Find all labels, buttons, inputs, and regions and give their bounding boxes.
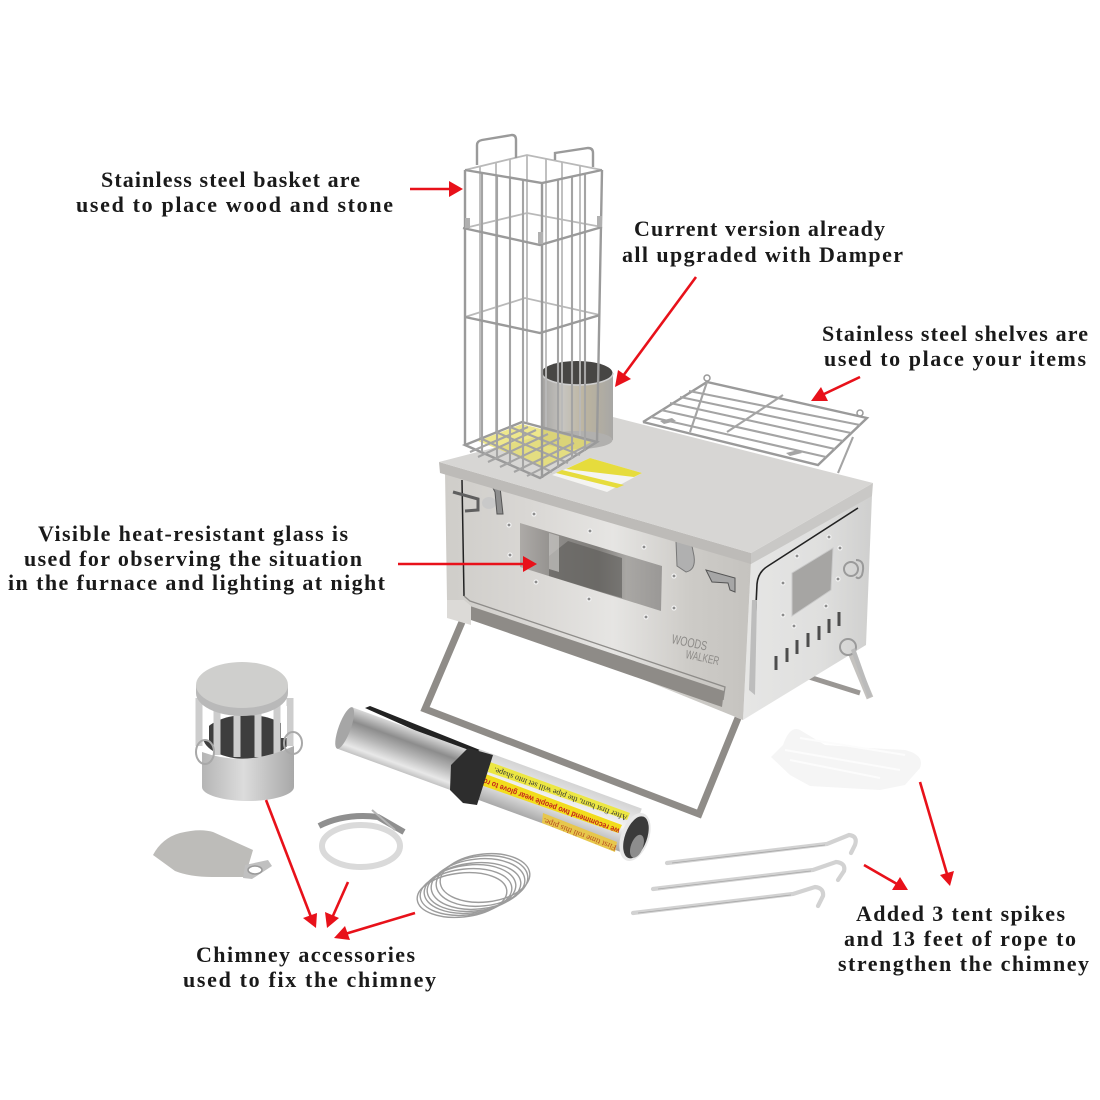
text: shelves: [822, 321, 1088, 371]
text: damper: Current version already: [634, 216, 885, 241]
arrow: from wire: [334, 913, 415, 940]
text: basket: [76, 167, 393, 217]
text: glass: [8, 521, 386, 595]
coil of rope: [771, 729, 921, 790]
text: chimney accessories: used to fix the chimney: [183, 967, 436, 992]
arrow: from spikes: [864, 865, 908, 890]
pipe black band: [450, 748, 493, 805]
basket back wires: [480, 155, 580, 438]
text: glass: used for observing the situation: [24, 546, 362, 571]
arrow: from rope: [920, 782, 954, 886]
brand mark: WALKER: [684, 647, 721, 668]
arrow: to damper: [615, 277, 696, 387]
pipe labelled section: [464, 749, 642, 854]
glass window: [520, 523, 662, 611]
chimney pipe: [331, 705, 657, 865]
text: chimney accessories: Chimney accessories: [196, 942, 415, 967]
pipe labelled section: First time roll this pipe.: [542, 816, 618, 853]
arrow: to shelf: [811, 377, 860, 401]
stove side panel: [743, 495, 872, 720]
damper pipe: [542, 361, 613, 449]
stove lid: [439, 417, 873, 564]
arrow: from clamp: [325, 882, 348, 928]
brand mark: WOODS: [670, 631, 709, 653]
text: shelves: Stainless steel shelves are: [822, 321, 1088, 346]
arrow: to basket: [410, 181, 463, 197]
basket front wires: [482, 173, 585, 470]
text: spikes and rope: [838, 901, 1089, 976]
spike 1: [667, 835, 856, 863]
arrow: from chimney cap: [266, 800, 317, 928]
text: basket: Stainless steel basket are: [101, 167, 360, 192]
pipe labelled section: we recommend two people wear glove to roll it: [472, 773, 622, 836]
basket grid floor: [465, 422, 597, 478]
warning label: [478, 424, 642, 492]
stainless steel basket: [463, 135, 602, 478]
stainless steel shelf: [643, 375, 867, 473]
pipe labelled section: After first burn, the pipe will set into shape.: [492, 766, 629, 823]
text: spikes and rope: Added 3 tent spikes: [856, 901, 1065, 926]
spike 2: [653, 862, 844, 889]
text: glass: in the furnace and lighting at night: [8, 570, 386, 595]
pipe open end: [613, 809, 657, 865]
stove with basket and shelf: [425, 135, 873, 814]
cap lower body: [202, 746, 294, 801]
hose clamp: [319, 810, 404, 867]
basket handles: [477, 135, 516, 165]
text: damper: [622, 216, 903, 267]
wire coil: [415, 849, 532, 922]
brand mark: [670, 631, 721, 668]
chimney cap: [196, 662, 302, 801]
cap rings: [196, 732, 302, 764]
text: spikes and rope: and 13 feet of rope to: [844, 926, 1076, 951]
damper plate: [153, 830, 272, 879]
cap ventilation cage: [199, 698, 291, 759]
text: basket: used to place wood and stone: [76, 192, 393, 217]
text: damper: all upgraded with Damper: [622, 242, 903, 267]
text: glass: Visible heat-resistant glass is: [38, 521, 348, 546]
tent spikes: [633, 835, 856, 913]
pipe metal section: [331, 705, 480, 793]
back leg: [809, 640, 870, 698]
latches: [453, 482, 735, 592]
text: chimney accessories: [183, 942, 436, 992]
text: spikes and rope: strengthen the chimney: [838, 951, 1089, 976]
stove front panel: [445, 472, 751, 720]
arrow: to glass window: [398, 556, 537, 572]
spike 3: [633, 887, 823, 913]
text: shelves: used to place your items: [824, 346, 1086, 371]
front folding leg: [425, 622, 738, 814]
cap top disc: [196, 662, 288, 716]
